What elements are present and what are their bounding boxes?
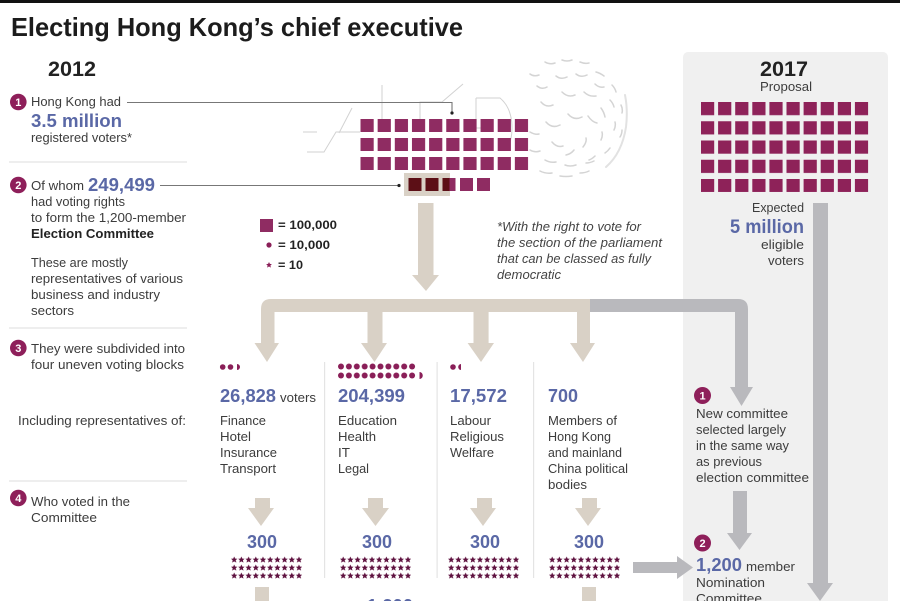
column 4: political bodies block: bodies — [548, 477, 588, 492]
arrow: main beige bracket — [254, 203, 595, 362]
step 1 text: Hong Kong had — [31, 94, 121, 109]
step 1 text — [10, 94, 132, 145]
column 1: finance block: Transport — [220, 461, 276, 476]
fourth row of squares — [408, 178, 490, 191]
footnote: *With the right to vote for — [497, 219, 642, 234]
column 4: political bodies block: Hong Kong — [548, 429, 611, 444]
step 2 text: to form the 1,200-member — [31, 210, 187, 225]
column 1: finance block: Finance — [220, 413, 266, 428]
leader line: voting rights — [160, 184, 401, 187]
text: expected voters: Expected — [752, 200, 804, 215]
column 2: education block: Legal — [338, 461, 369, 476]
legend: = 10 — [278, 258, 303, 272]
text: expected voters — [730, 200, 805, 268]
heading: 2017 — [760, 58, 812, 94]
step 3 text: They were subdivided into — [31, 341, 185, 356]
column 2: education block: 204,399 — [338, 386, 405, 406]
column 2: education block: Health — [338, 429, 376, 444]
column 1: finance block: Hotel — [220, 429, 251, 444]
step 2 text: had voting rights — [31, 194, 125, 209]
legend: = 10,000 — [278, 238, 330, 252]
step 2: nomination committee: 1,200 — [696, 555, 742, 575]
chart: 2017 eligible voters squares — [701, 102, 868, 192]
arrow stubs at bottom — [255, 587, 596, 601]
column 3: labour block: Religious — [450, 429, 504, 444]
arrow: gray branch to new committee — [580, 299, 753, 406]
column 3: labour block: 17,572 — [450, 386, 507, 406]
seats: 300 per block: 300 — [247, 532, 277, 552]
column 2: education block: Education — [338, 413, 397, 428]
step 1: new committee — [694, 387, 809, 485]
footnote: that can be classed as fully — [497, 251, 652, 266]
heading: 2017: Proposal — [760, 79, 812, 94]
step 1: new committee: selected largely — [696, 422, 786, 437]
column 1: finance block: 26,828 — [220, 386, 276, 406]
chart: 2012 registered voters squares — [360, 119, 532, 196]
step 2 text: Election Committee — [31, 226, 154, 241]
seats: 300 per block: 300 — [574, 532, 604, 552]
column 3: labour block — [450, 364, 507, 460]
step 1: new committee: as previous — [696, 454, 762, 469]
step 4 text — [10, 490, 130, 525]
step 2: nomination committee: member — [746, 559, 796, 574]
step 4 text: 4 — [15, 493, 22, 505]
step 4 text: Who voted in the — [31, 494, 130, 509]
column 4: political bodies block: 700 — [548, 386, 578, 406]
step 2 text: Of whom — [31, 178, 84, 193]
text: expected voters: 5 million — [730, 217, 804, 238]
step 1: new committee: in the same way — [696, 438, 789, 453]
step 1 text: 3.5 million — [31, 111, 122, 131]
text: expected voters: eligible — [761, 237, 804, 252]
dots — [450, 364, 461, 370]
step 3 text: 3 — [15, 343, 21, 355]
arrow: long gray — [807, 203, 833, 601]
step 2: nomination committee: 2 — [699, 538, 706, 550]
row label: Including representatives of: — [18, 413, 186, 428]
step 2 text: representatives of various — [31, 271, 184, 286]
column dividers — [324, 362, 534, 578]
title: Electing Hong Kong’s chief executive — [11, 12, 463, 42]
step 4 text: Committee — [31, 510, 97, 525]
arrow: 2012 blocks to nomination — [633, 556, 693, 579]
footnote — [497, 219, 663, 282]
column 1: finance block: Insurance — [220, 445, 277, 460]
dots — [220, 364, 240, 370]
step 1: new committee: New committee — [696, 406, 788, 421]
column 3: labour block: Welfare — [450, 445, 494, 460]
column 4: political bodies block: and mainland — [548, 445, 622, 460]
step 2: nomination committee: Nomination — [696, 575, 765, 590]
column 3: labour block: Labour — [450, 413, 492, 428]
column 2: education block — [338, 363, 423, 476]
column 4: political bodies block: China political — [548, 461, 628, 476]
arrow: committee to nomination — [727, 491, 752, 550]
column 1: finance block: voters — [280, 390, 317, 405]
seats: 300 per block — [231, 532, 620, 580]
legend: = 100,000 — [278, 218, 337, 232]
highlight: voters with rights — [404, 173, 450, 196]
column 2: education block: IT — [338, 445, 350, 460]
step 1: new committee: election committee — [696, 470, 809, 485]
legend — [260, 218, 337, 272]
step 3 text: four uneven voting blocks — [31, 357, 185, 372]
step 2 text: sectors — [31, 303, 75, 318]
heading: 2012: 2012 — [48, 58, 96, 81]
step 1 text: 1 — [15, 97, 21, 109]
footnote: the section of the parliament — [497, 235, 663, 250]
text: expected voters: voters — [768, 253, 805, 268]
panel: 2017 background — [683, 52, 888, 601]
arrows: to 300 seats — [248, 498, 601, 526]
top rule — [0, 0, 900, 3]
seats: 300 per block: 300 — [470, 532, 500, 552]
footnote: democratic — [497, 267, 562, 282]
watermark — [303, 84, 512, 152]
step 2 text: 249,499 — [88, 175, 155, 195]
leader line: registered voters — [127, 102, 454, 115]
heading: 2017: 2017 — [760, 58, 808, 81]
step 2 text: These are mostly — [31, 255, 128, 270]
step 1 text: registered voters* — [31, 130, 132, 145]
dots — [338, 363, 423, 380]
step 2: nomination committee — [694, 534, 796, 601]
column 1: finance block — [220, 364, 317, 476]
step 2 text: 2 — [15, 180, 21, 192]
step 3 text — [10, 340, 185, 372]
step 2 text — [10, 175, 187, 318]
column 4: political bodies block — [548, 386, 628, 492]
step 2 text: business and industry — [31, 287, 161, 302]
seats: 300 per block: 300 — [362, 532, 392, 552]
column 4: political bodies block: Members of — [548, 413, 617, 428]
step 1: new committee: 1 — [699, 390, 706, 402]
icon: golf ball — [530, 60, 627, 176]
